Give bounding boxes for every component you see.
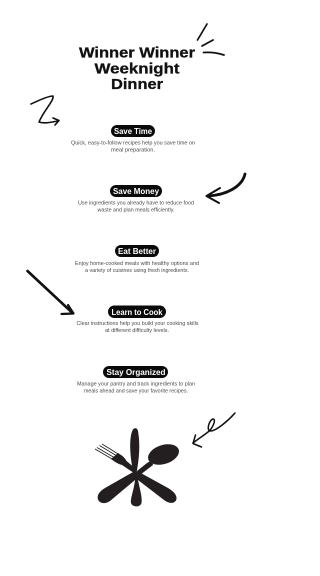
save time description: meal preparation. (111, 148, 155, 154)
panel: stay organized (77, 366, 195, 394)
crossed handles (98, 472, 177, 506)
arrow: squiggle (31, 96, 59, 125)
stay organized pill: Stay Organized (106, 368, 166, 377)
save time description (71, 140, 195, 154)
icon: crossed cutlery (95, 428, 182, 506)
learn to cook description: at different difficulty levels. (105, 328, 169, 334)
stay organized description (77, 382, 195, 394)
save money description: Use ingredients you already have to reduce food (78, 200, 194, 206)
save money description (78, 200, 194, 214)
learn to cook pill: Learn to Cook (112, 308, 163, 317)
panel: save money (78, 185, 194, 214)
save time pill: Save Time (114, 127, 153, 136)
panel: save time (71, 125, 195, 154)
icon: sparkle rays (198, 24, 224, 55)
eat better description: a variety of cuisines using fresh ingredients. (85, 268, 189, 274)
save time description: Quick, easy-to-follow recipes help you save time on (71, 140, 195, 146)
panel: eat better (75, 245, 199, 274)
eat better pill: Eat Better (118, 247, 156, 256)
save money pill: Save Money (113, 187, 160, 196)
spoon (137, 441, 182, 475)
learn to cook description: Clear instructions help you build your cooking skills (76, 321, 199, 327)
learn to cook description (76, 321, 199, 334)
eat better description (75, 261, 199, 274)
panel: learn to cook (76, 306, 199, 334)
fork (95, 444, 137, 473)
title: Winner Winner (79, 44, 195, 62)
save money description: waste and plan meals efficiently. (98, 208, 174, 214)
arrow: curved left (206, 174, 245, 203)
arrow: diagonal down right (28, 271, 74, 314)
title: Weeknight (94, 60, 180, 78)
arrow: curly (193, 413, 235, 447)
knife (130, 428, 139, 473)
stay organized description: meals ahead and save your favorite recipes. (84, 388, 188, 394)
title: Dinner (111, 76, 163, 93)
title (79, 44, 195, 93)
stay organized description: Manage your pantry and track ingredients to plan (77, 382, 195, 388)
eat better description: Enjoy home-cooked meals with healthy options and (75, 261, 199, 267)
